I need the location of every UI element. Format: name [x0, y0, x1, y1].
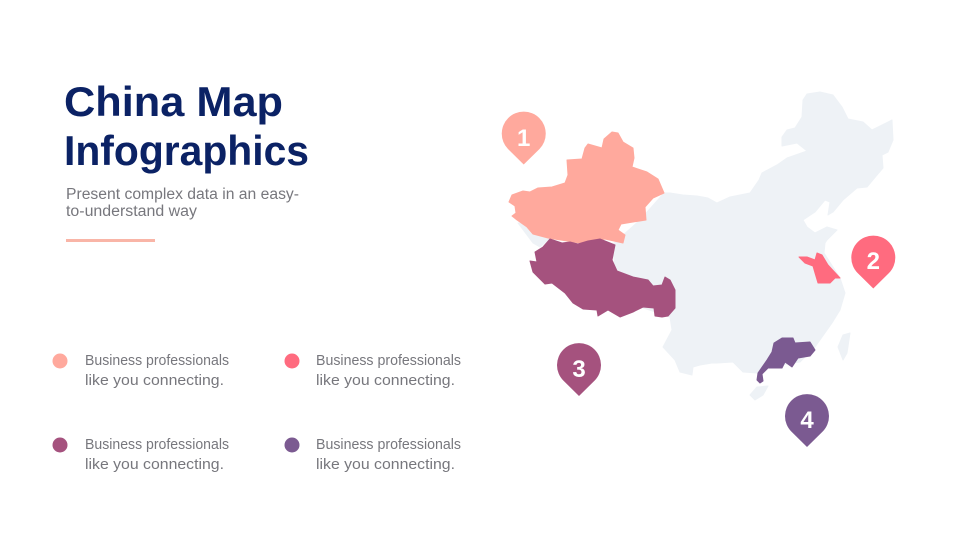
pin 2: 2	[867, 248, 880, 275]
legend item 2	[284, 352, 461, 389]
subtitle: to-understand way	[66, 203, 197, 220]
pin 1	[502, 112, 546, 164]
pin 1: 1	[517, 125, 530, 152]
accent bar	[66, 239, 155, 242]
western edge	[518, 223, 550, 247]
pin 3: 3	[572, 356, 586, 383]
legend item 1	[52, 352, 229, 389]
Taiwan	[838, 333, 850, 360]
title	[64, 78, 309, 174]
pin 4	[785, 394, 829, 447]
map of China	[509, 92, 893, 400]
mainland	[612, 92, 893, 375]
legend item 4	[284, 436, 461, 473]
legend item 1: Business professionals	[85, 352, 229, 369]
title: China Map	[64, 78, 283, 125]
legend item 3	[52, 436, 229, 473]
region: Jiangsu	[799, 253, 840, 283]
legend item 3: Business professionals	[85, 436, 229, 453]
legend item 2: Business professionals	[316, 352, 461, 369]
Hainan	[750, 386, 768, 400]
subtitle: Present complex data in an easy-	[66, 186, 299, 203]
pin 3	[557, 343, 601, 396]
pin 2	[851, 236, 895, 288]
region: Tibet	[530, 239, 675, 317]
pin 4: 4	[800, 407, 814, 434]
legend item 2: like you connecting.	[316, 372, 455, 389]
title: Infographics	[64, 127, 309, 174]
legend item 4: Business professionals	[316, 436, 461, 453]
region: Guangdong	[757, 338, 815, 383]
legend item 3: like you connecting.	[85, 456, 224, 473]
subtitle	[66, 186, 299, 220]
region: Xinjiang	[509, 132, 664, 243]
legend item 1: like you connecting.	[85, 372, 224, 389]
legend item 4: like you connecting.	[316, 456, 455, 473]
